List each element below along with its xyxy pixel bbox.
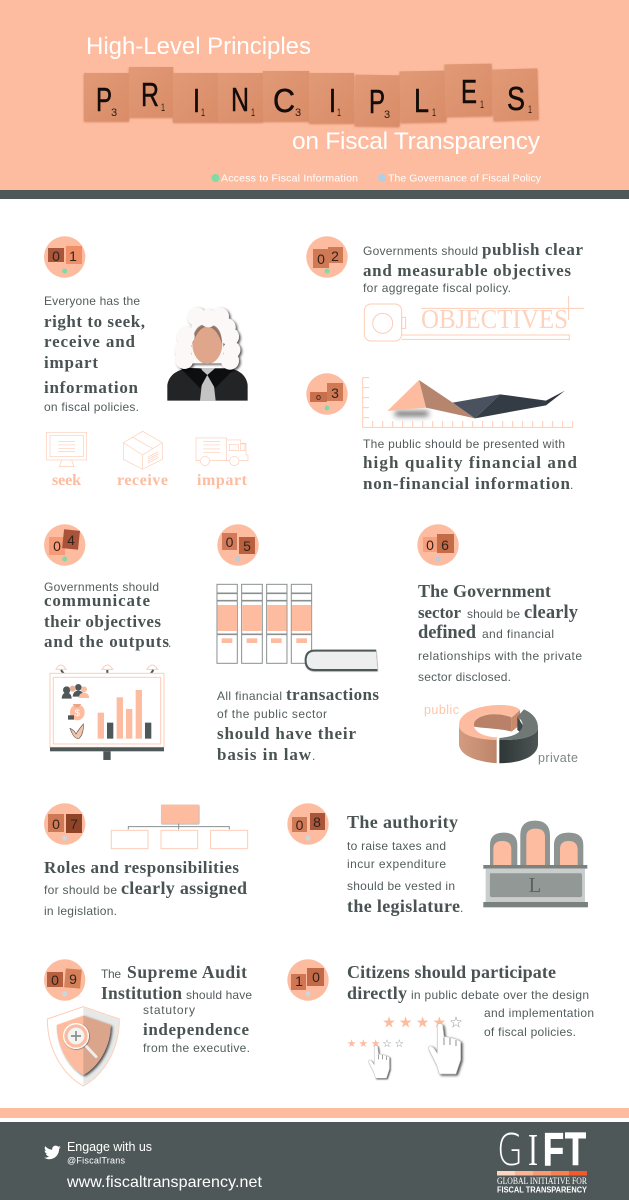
text 08: to raise taxes and xyxy=(347,839,446,853)
badge 01 xyxy=(44,236,85,278)
badge 01: 0 xyxy=(52,248,60,264)
social text xyxy=(66,1140,263,1191)
private segment xyxy=(499,709,538,763)
badge 07 xyxy=(44,803,85,845)
icon labels: impart xyxy=(197,472,248,489)
badge 09 xyxy=(44,959,85,1001)
badge 05: 0 xyxy=(226,534,234,550)
scrabble tiles spelling PRINCIPLES: P xyxy=(369,83,385,120)
principle 04 xyxy=(44,524,171,760)
text 04: Governments should xyxy=(44,580,159,594)
scrabble tiles spelling PRINCIPLES: 1 xyxy=(161,102,165,114)
badge 02: 0 xyxy=(317,251,325,267)
text 05: of the public sector xyxy=(217,707,327,721)
icon: receive box xyxy=(123,431,162,469)
GIFT logo: G xyxy=(497,1125,523,1176)
text 06 xyxy=(418,581,582,684)
badge 09: 0 xyxy=(51,972,59,988)
text 09: Supreme Audit xyxy=(127,962,247,982)
chart: public private ring xyxy=(459,705,538,763)
text 05: . xyxy=(312,749,315,763)
icon labels: seek xyxy=(52,472,81,489)
badge 04: 4 xyxy=(67,532,75,548)
scrabble tiles spelling PRINCIPLES xyxy=(84,64,539,126)
public segment xyxy=(459,705,520,763)
text 08: should be vested in xyxy=(347,879,455,893)
scrabble tiles spelling PRINCIPLES: L xyxy=(414,82,429,119)
text 04: and the outputs xyxy=(44,632,169,651)
text 09: should have xyxy=(186,988,252,1002)
text 07: for should be xyxy=(44,883,117,897)
text 06: defined xyxy=(418,623,477,643)
icon: law book binders xyxy=(217,584,377,670)
principle 07 xyxy=(44,803,248,918)
text 07 xyxy=(44,858,247,918)
principle 03 xyxy=(306,373,578,493)
GIFT logo: F xyxy=(543,1123,564,1175)
text 05: transactions xyxy=(286,685,379,704)
badge 10 xyxy=(287,959,329,1001)
badge 10: 0 xyxy=(312,969,320,985)
small hand xyxy=(368,1045,389,1078)
header banner xyxy=(0,0,629,199)
icon: seek monitor xyxy=(46,432,87,467)
GIFT logo xyxy=(497,1123,587,1194)
scrabble tiles spelling PRINCIPLES: 1 xyxy=(337,107,341,119)
text 03: high quality financial and xyxy=(363,453,578,472)
text 01: information xyxy=(44,378,139,397)
principle 06 xyxy=(417,524,582,765)
text 03: The public should be presented with xyxy=(363,437,565,451)
badge 09: 9 xyxy=(69,971,77,987)
legend xyxy=(212,172,542,184)
text 01: Everyone has the xyxy=(44,294,140,308)
text 01 xyxy=(44,294,145,414)
text 09: Institution xyxy=(101,983,182,1003)
text 10: in public debate over the design xyxy=(411,988,589,1002)
money bag: $ xyxy=(75,708,81,718)
principle 02 xyxy=(306,236,584,341)
scrabble tiles spelling PRINCIPLES: C xyxy=(273,82,295,119)
icon: legislature building: L xyxy=(529,875,541,897)
star rows: ★ xyxy=(382,1014,396,1032)
text 04: their objectives xyxy=(44,612,161,631)
text 03: non-financial information xyxy=(363,474,571,493)
text 03 xyxy=(363,437,578,493)
text 07: in legislation. xyxy=(44,904,117,918)
text 07: Roles and responsibilities xyxy=(44,858,239,877)
badge 02: 2 xyxy=(331,248,339,264)
principle 09 xyxy=(44,959,252,1086)
text 01: receive and xyxy=(44,332,136,351)
text 09: independence xyxy=(143,1020,249,1039)
star rows: ☆ xyxy=(395,1037,404,1050)
badge 08: 8 xyxy=(313,814,321,830)
billboard lamps xyxy=(56,665,158,674)
text 06: sector xyxy=(418,603,461,622)
text 10: of fiscal policies. xyxy=(484,1025,576,1039)
social text: @FiscalTrans xyxy=(67,1156,126,1166)
social text: www.fiscaltransparency.net xyxy=(66,1174,263,1191)
ring labels: private xyxy=(538,751,578,765)
icon: impart truck xyxy=(196,438,248,466)
star rows: ★ xyxy=(347,1037,356,1050)
scrabble tiles spelling PRINCIPLES: N xyxy=(231,81,249,118)
text 02: Governments should xyxy=(363,244,478,258)
scrabble tiles spelling PRINCIPLES: E xyxy=(461,73,477,110)
text 06: and financial xyxy=(482,627,554,641)
GIFT logo: T xyxy=(565,1123,586,1175)
text 05: should have their xyxy=(217,724,356,743)
principle 05 xyxy=(217,524,379,764)
star rows: ★ xyxy=(432,1014,446,1032)
text 06: sector disclosed. xyxy=(418,670,511,684)
text 01: right to seek, xyxy=(44,312,145,331)
bars xyxy=(98,690,151,739)
text 02 xyxy=(363,240,583,295)
text 04: communicate xyxy=(44,591,150,610)
scrabble tiles spelling PRINCIPLES: 1 xyxy=(480,99,484,111)
text 02: publish clear xyxy=(482,240,583,259)
badge 07: 7 xyxy=(70,816,78,832)
scrabble tiles spelling PRINCIPLES: I xyxy=(329,82,336,119)
legend: Access to Fiscal Information xyxy=(221,172,358,184)
scrabble tiles spelling PRINCIPLES: I xyxy=(193,82,200,119)
principle 01 xyxy=(44,236,248,489)
large hand xyxy=(428,1023,461,1074)
text 08: incur expenditure xyxy=(347,857,446,871)
GIFT logo: FISCAL TRANSPARENCY xyxy=(497,1184,587,1194)
text 10 xyxy=(347,962,594,1039)
icon: legislature building xyxy=(483,821,588,907)
badge 03 xyxy=(306,373,348,415)
scrabble tiles spelling PRINCIPLES: P xyxy=(96,81,112,118)
text 10: and implementation xyxy=(484,1006,594,1020)
scrabble tiles spelling PRINCIPLES: 1 xyxy=(201,107,205,119)
badge 01: 1 xyxy=(69,248,77,264)
badge 04: 0 xyxy=(53,538,61,554)
badge 08: 0 xyxy=(296,817,304,833)
star rows: ★ xyxy=(399,1014,413,1032)
badge 10: 1 xyxy=(295,973,303,989)
star rows: ☆ xyxy=(449,1014,463,1032)
title line 1: High-Level Principles xyxy=(86,33,311,60)
text 05: basis in law xyxy=(217,745,312,764)
text 09: from the executive. xyxy=(143,1041,250,1055)
scrabble tiles spelling PRINCIPLES: 1 xyxy=(251,107,255,119)
text 10: Citizens should participate xyxy=(347,962,556,982)
scrabble tiles spelling PRINCIPLES: S xyxy=(507,80,525,117)
legend: The Governance of Fiscal Policy xyxy=(388,172,542,184)
text 01: on fiscal policies. xyxy=(44,400,139,414)
icon: objectives measuring tape xyxy=(364,296,584,341)
text 04 xyxy=(44,580,171,651)
icon: twitter bird xyxy=(44,1146,61,1159)
icon: shield with magnifier xyxy=(47,1007,119,1086)
badge 06: 6 xyxy=(441,537,449,553)
badge 03: o xyxy=(316,392,321,402)
star rows: ☆ xyxy=(382,1037,392,1050)
icon: org chart xyxy=(111,805,248,849)
text 09: The xyxy=(101,967,121,981)
text 08 xyxy=(347,812,463,916)
scrabble tiles spelling PRINCIPLES: 3 xyxy=(111,107,117,119)
text 09: statutory xyxy=(143,1003,195,1017)
star rows: ★ xyxy=(371,1037,380,1050)
badge 04 xyxy=(44,524,85,566)
star rows: ★ xyxy=(416,1014,430,1032)
text 05: All financial xyxy=(217,689,282,703)
footer xyxy=(0,1108,629,1200)
text 08: the legislature xyxy=(347,896,460,916)
text 06: relationships with the private xyxy=(418,649,582,663)
social text: Engage with us xyxy=(67,1140,152,1154)
text 08: . xyxy=(460,901,463,915)
star rows: ★ xyxy=(359,1037,368,1050)
icon: rating stars and hands xyxy=(347,1014,463,1078)
text 05 xyxy=(217,685,379,764)
badge 03: 3 xyxy=(331,385,339,401)
text 02: for aggregate fiscal policy. xyxy=(363,281,511,295)
ring labels: public xyxy=(424,703,459,717)
badge 05: 5 xyxy=(243,538,251,554)
text 06: clearly xyxy=(524,603,579,623)
icon labels: receive xyxy=(117,472,168,489)
scrabble tiles spelling PRINCIPLES: 3 xyxy=(384,109,390,121)
scrabble tiles spelling PRINCIPLES: 1 xyxy=(432,107,436,119)
ring labels xyxy=(424,703,578,765)
checkmark leaf xyxy=(70,724,83,739)
text 09 xyxy=(101,962,252,1055)
text 02: and measurable objectives xyxy=(363,261,571,280)
text 06: The Government xyxy=(418,581,551,601)
text 08: The authority xyxy=(347,812,458,832)
text 04: . xyxy=(168,636,171,650)
chart: folded paper line on ruler axes xyxy=(363,378,573,427)
icon: objectives measuring tape: OBJECTIVES xyxy=(421,304,568,334)
icon: judge with wig xyxy=(167,307,248,401)
scrabble tiles spelling PRINCIPLES: R xyxy=(141,76,159,113)
text 10: directly xyxy=(347,983,407,1003)
icon labels xyxy=(52,472,248,489)
title line 2: on Fiscal Transparency xyxy=(292,128,541,155)
scrabble tiles spelling PRINCIPLES: 3 xyxy=(295,107,301,119)
text 03: . xyxy=(570,478,573,492)
GIFT logo: I xyxy=(528,1124,538,1175)
badge 07: 0 xyxy=(52,816,60,832)
badge 08 xyxy=(287,803,329,845)
text 06: should be xyxy=(467,607,520,621)
badge 06: 0 xyxy=(426,537,434,553)
badge 02 xyxy=(306,236,348,278)
icon: billboard with chart xyxy=(50,665,164,760)
GIFT logo: GLOBAL INITIATIVE FOR xyxy=(497,1176,587,1186)
scrabble tiles spelling PRINCIPLES: 1 xyxy=(528,104,532,116)
badge 05 xyxy=(217,524,259,566)
badge 06 xyxy=(417,524,459,566)
text 07: clearly assigned xyxy=(121,878,247,898)
people group xyxy=(62,684,89,699)
star rows xyxy=(347,1014,463,1050)
principle 08 xyxy=(287,803,588,916)
text 01: impart xyxy=(44,353,98,372)
principle 10 xyxy=(287,959,594,1078)
